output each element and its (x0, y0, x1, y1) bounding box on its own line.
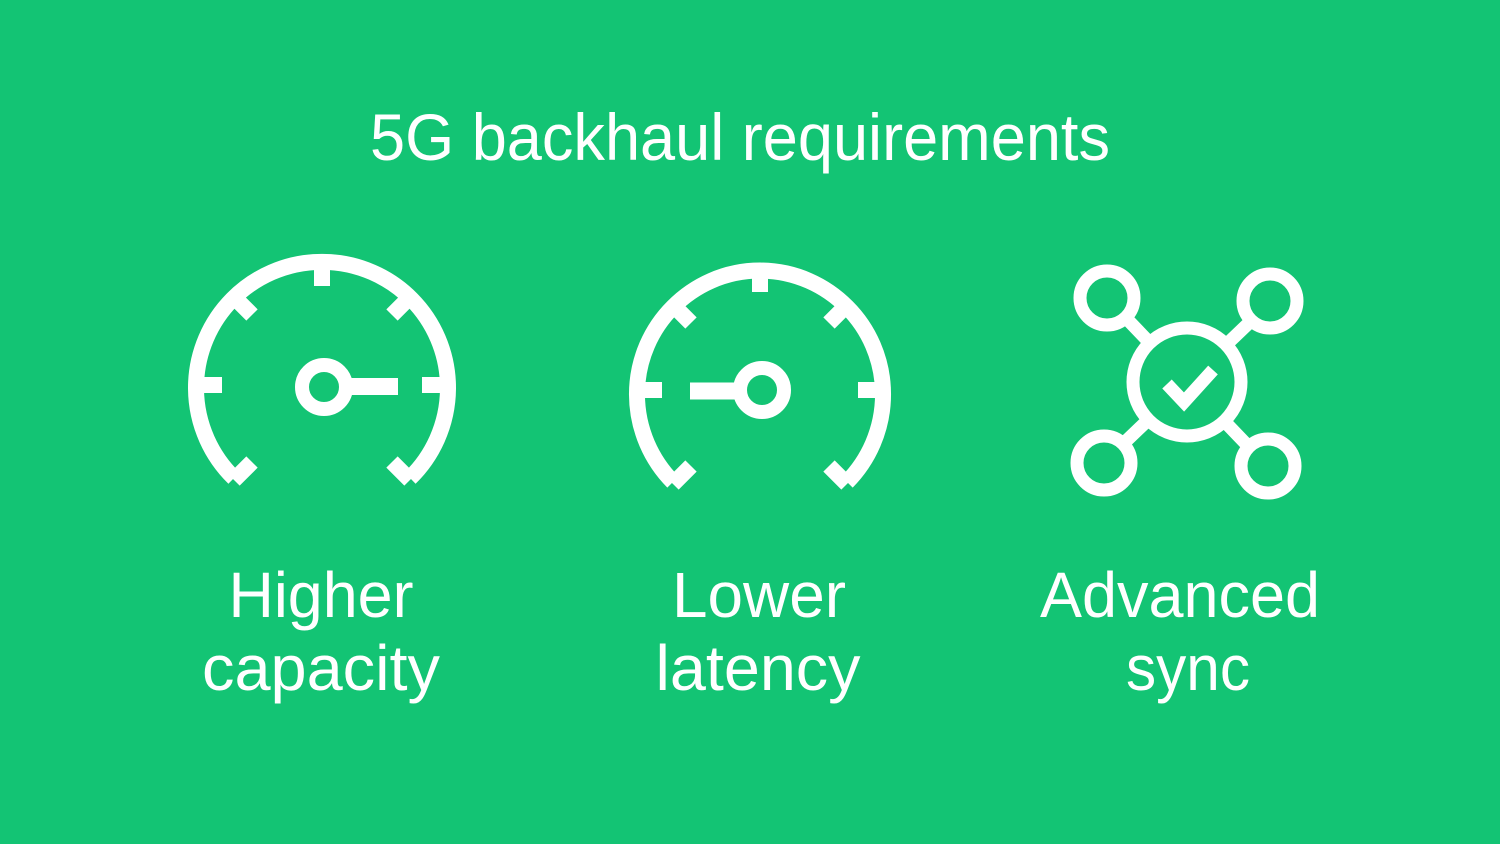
label: lower latency: latency (656, 632, 860, 704)
title: 5G backhaul requirements (370, 100, 1110, 174)
label: higher capacity: capacity (202, 632, 440, 704)
label: advanced sync: Advanced (1040, 559, 1320, 631)
label: lower latency (656, 559, 860, 704)
icon: speedometer high (196, 262, 448, 480)
icon: network sync (1077, 271, 1297, 493)
label: advanced sync (1040, 559, 1320, 704)
label: lower latency: Lower (672, 559, 846, 631)
icon: speedometer low (636, 266, 884, 484)
label: higher capacity: Higher (228, 559, 414, 631)
label: advanced sync: sync (1126, 632, 1250, 704)
label: higher capacity (202, 559, 440, 704)
